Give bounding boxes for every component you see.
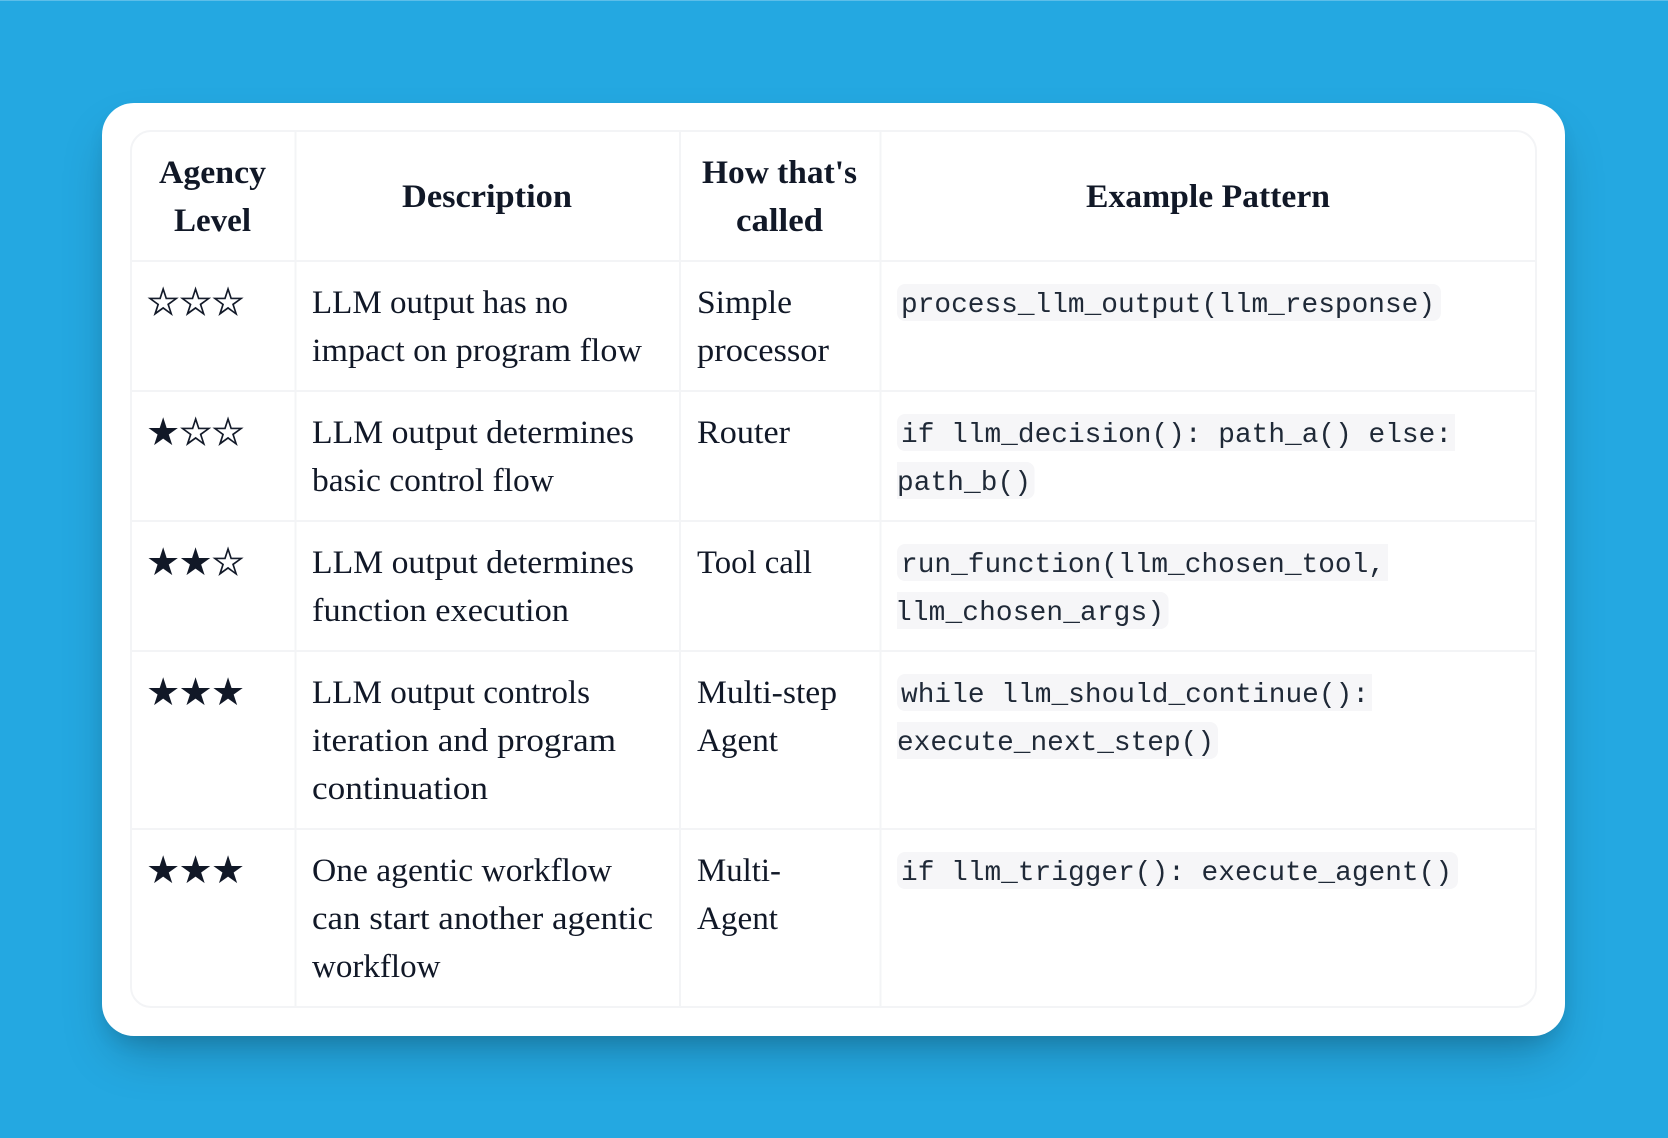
description text: LLM output determines: [312, 415, 634, 451]
row 2: router: [146, 410, 1455, 499]
call type: Tool call: [697, 545, 812, 581]
description text: LLM output has no: [312, 285, 568, 321]
heading: agency level: Level: [174, 203, 251, 239]
panel: white card: [102, 102, 1565, 1036]
code example: process_llm_output(llm_response): [901, 290, 1435, 321]
description text: LLM output controls: [312, 675, 590, 711]
code example: execute_next_step(): [897, 728, 1214, 759]
code example: if llm_decision(): path_a() else:: [901, 420, 1452, 451]
header row: [159, 155, 1330, 239]
code example: run_function(llm_chosen_tool,: [901, 550, 1385, 581]
call type: Agent: [697, 723, 778, 759]
heading: how that's called: called: [736, 203, 823, 239]
stars: one filled: ★☆☆: [146, 410, 243, 455]
call type: Agent: [697, 901, 778, 937]
description text: impact on program flow: [312, 333, 642, 369]
description text: can start another agentic: [312, 901, 653, 937]
row 3: tool call: [146, 540, 1388, 629]
stars: zero filled: ☆☆☆: [146, 280, 243, 325]
description text: basic control flow: [312, 463, 554, 499]
description text: [312, 545, 634, 629]
stars: three filled: ★★★: [146, 670, 243, 715]
code example: [897, 414, 1455, 499]
description text: LLM output determines: [312, 545, 634, 581]
description text: [312, 415, 634, 499]
heading: agency level: Agency: [159, 155, 267, 191]
code example: while llm_should_continue():: [901, 680, 1369, 711]
call type: Multi-: [697, 853, 781, 889]
row 4: multi-step agent: [146, 670, 1372, 807]
call type: [697, 853, 781, 937]
code example: if llm_trigger(): execute_agent(): [901, 858, 1452, 889]
heading: how that's called: [702, 155, 857, 239]
call type: [697, 285, 829, 369]
description text: [312, 675, 616, 807]
code example: [895, 544, 1388, 629]
description text: continuation: [312, 771, 488, 807]
code example: llm_chosen_args): [895, 598, 1164, 629]
row 1: simple processor: [146, 280, 1441, 369]
description text: [312, 285, 642, 369]
row 5: multi-agent: [146, 848, 1458, 985]
description text: workflow: [312, 949, 441, 985]
call type: Multi-step: [697, 675, 837, 711]
heading: agency level: [159, 155, 267, 239]
description text: iteration and program: [312, 723, 616, 759]
description text: function execution: [312, 593, 569, 629]
table grid: [131, 131, 1536, 1007]
heading: how that's called: How that's: [702, 155, 857, 191]
call type: Router: [697, 415, 790, 451]
call type: [697, 675, 837, 759]
code example: path_b(): [897, 468, 1031, 499]
description text: [312, 853, 653, 985]
stars: two filled: ★★☆: [146, 540, 243, 585]
heading: description: Description: [402, 179, 572, 215]
call type: Simple: [697, 285, 792, 321]
call type: processor: [697, 333, 829, 369]
heading: example pattern: Example Pattern: [1086, 179, 1330, 215]
description text: One agentic workflow: [312, 853, 612, 889]
stars: three filled: ★★★: [146, 848, 243, 893]
code example: [897, 674, 1372, 759]
